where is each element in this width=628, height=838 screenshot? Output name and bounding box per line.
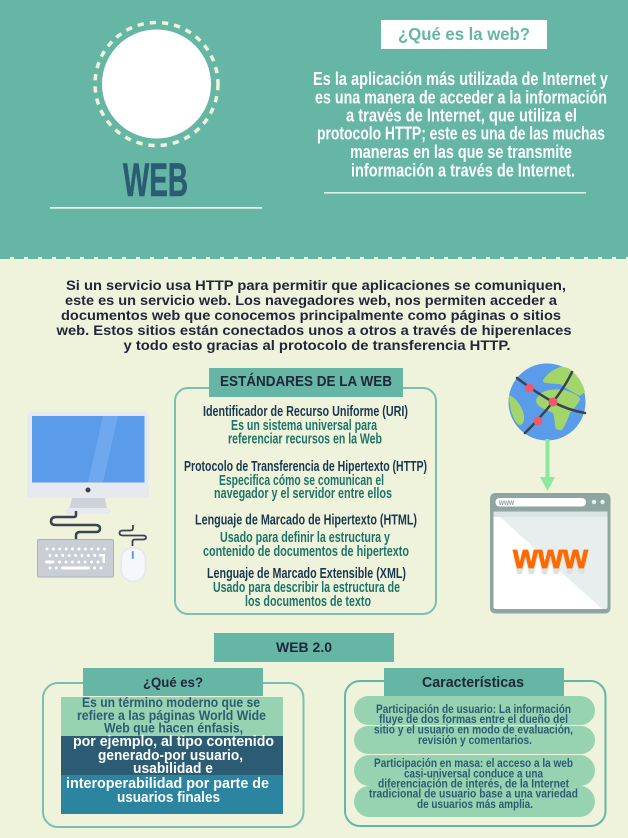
header band — [0, 0, 628, 258]
text block: definition of the web: maneras en las que se transmite — [350, 142, 572, 162]
standard: URI: Identificador de Recurso Uniforme (URI) — [203, 404, 408, 420]
standard: HTTP — [184, 459, 427, 502]
standard: HTTP: Especifica cómo se comunican el — [219, 472, 384, 489]
icon: browser window: www — [512, 538, 589, 576]
strip: teal blue text — [61, 775, 283, 814]
standard: XML: Usado para describir la estructura de — [213, 579, 400, 596]
pills: mass participation: diferenciación de interés, de la Internet — [378, 778, 569, 790]
standard: HTTP: navegador y el servidor entre ellos — [214, 485, 392, 502]
heading: WEB 2.0 — [214, 633, 394, 662]
text block: intro paragraph: Si un servicio usa HTTP para permitir que aplicaciones se comuniquen, — [66, 277, 566, 293]
standard: URI: Es un sistema universal para — [231, 417, 377, 434]
strip: dark blue text: generado-por usuario, — [98, 747, 243, 764]
heading: web standards — [209, 368, 403, 397]
icon: white circle with dashed ring — [95, 22, 218, 146]
text block: intro paragraph: web. Estos sitios están conectados unos a otros a través de hiperenlaces — [55, 322, 572, 338]
pills: mass participation: de usuarios más amplia. — [417, 799, 533, 811]
pills: user participation: revisión y comentarios. — [418, 735, 532, 747]
pills: mass participation: tradicional de usuario base a una variedad — [369, 788, 578, 800]
pills: user participation: Participación de usuario: La información — [376, 704, 571, 716]
standard: HTTP: Protocolo de Transferencia de Hipertexto (HTTP) — [184, 459, 427, 475]
strip: light green text: refiere a las páginas World Wide — [77, 708, 266, 723]
icon: globe with network — [508, 364, 586, 440]
panel: what is web 2.0 — [43, 668, 304, 827]
text block: intro paragraph: este es un servicio web. Los navegadores web, nos permiten acceder a — [65, 292, 557, 308]
title underline — [50, 207, 262, 209]
panel: web standards — [175, 368, 436, 614]
heading: ¿Qué es? — [83, 668, 263, 696]
text block: intro paragraph: y todo esto gracias al protocolo de transferencia HTTP. — [124, 337, 510, 353]
heading: Características: Características — [422, 675, 524, 691]
pills: mass participation — [354, 755, 595, 817]
heading: web standards: ESTÁNDARES DE LA WEB — [220, 373, 392, 390]
standard: XML: los documentos de texto — [245, 593, 371, 610]
heading: ¿Qué es?: ¿Qué es? — [143, 674, 203, 690]
text block: definition of the web: información a través de Internet. — [351, 160, 575, 180]
strip: light green text: Web que hacen énfasis, — [104, 720, 243, 736]
heading: ¿Qué es la web? — [381, 20, 547, 49]
heading: ¿Qué es la web?: ¿Qué es la web? — [398, 24, 530, 44]
strip: teal blue text: interoperabilidad por parte de — [66, 775, 269, 792]
pills: user participation — [354, 696, 595, 754]
panel: characteristics — [345, 668, 606, 826]
icon: browser window — [490, 493, 610, 614]
pills: user participation: fluye de dos formas entre el dueño del — [379, 714, 568, 726]
standard: HTML — [195, 512, 417, 560]
heading: WEB 2.0: WEB 2.0 — [276, 640, 332, 655]
definition underline — [324, 192, 586, 194]
pills: user participation: sitio y el usuario en modo de evaluación, — [374, 724, 573, 736]
standard: XML — [207, 566, 406, 610]
strip: dark blue text — [61, 733, 283, 777]
text block: definition of the web: a través de Internet, que utiliza el — [346, 106, 577, 126]
text block: intro paragraph — [55, 277, 572, 353]
strip: light green text: Es un término moderno que se — [82, 695, 260, 710]
strip: dark blue text: por ejemplo, al tipo contenido — [73, 733, 274, 750]
standard: HTML: Usado para definir la estructura y — [220, 529, 390, 546]
text block: intro paragraph: documentos web que conocemos principalmente como páginas o sitios — [61, 307, 561, 323]
strip: teal blue text: usuarios finales — [117, 789, 220, 806]
text block: definition of the web — [313, 69, 608, 180]
standard: HTML: contenido de documentos de hipertexto — [203, 543, 409, 560]
strip: light green text — [61, 695, 283, 736]
strip: dark blue text: usabilidad e — [133, 760, 213, 777]
standard: XML: Lenguaje de Marcado Extensible (XML) — [207, 566, 406, 582]
standard: URI — [203, 404, 408, 448]
arrow: globe to browser — [540, 439, 555, 491]
pills: mass participation: Participación en masa: el acceso a la web — [374, 758, 573, 770]
standard: URI: referenciar recursos en la Web — [228, 430, 382, 448]
heading: Características — [384, 668, 564, 696]
standard: HTML: Lenguaje de Marcado de Hipertexto (HTML) — [195, 512, 417, 528]
icon: browser window: www — [512, 544, 589, 582]
icon: desktop computer with keyboard and mouse — [27, 412, 149, 582]
pills: mass participation: casi-universal conduce a una — [404, 768, 544, 780]
icon: browser window: www — [498, 498, 515, 507]
title: WEB: WEB — [123, 153, 188, 206]
